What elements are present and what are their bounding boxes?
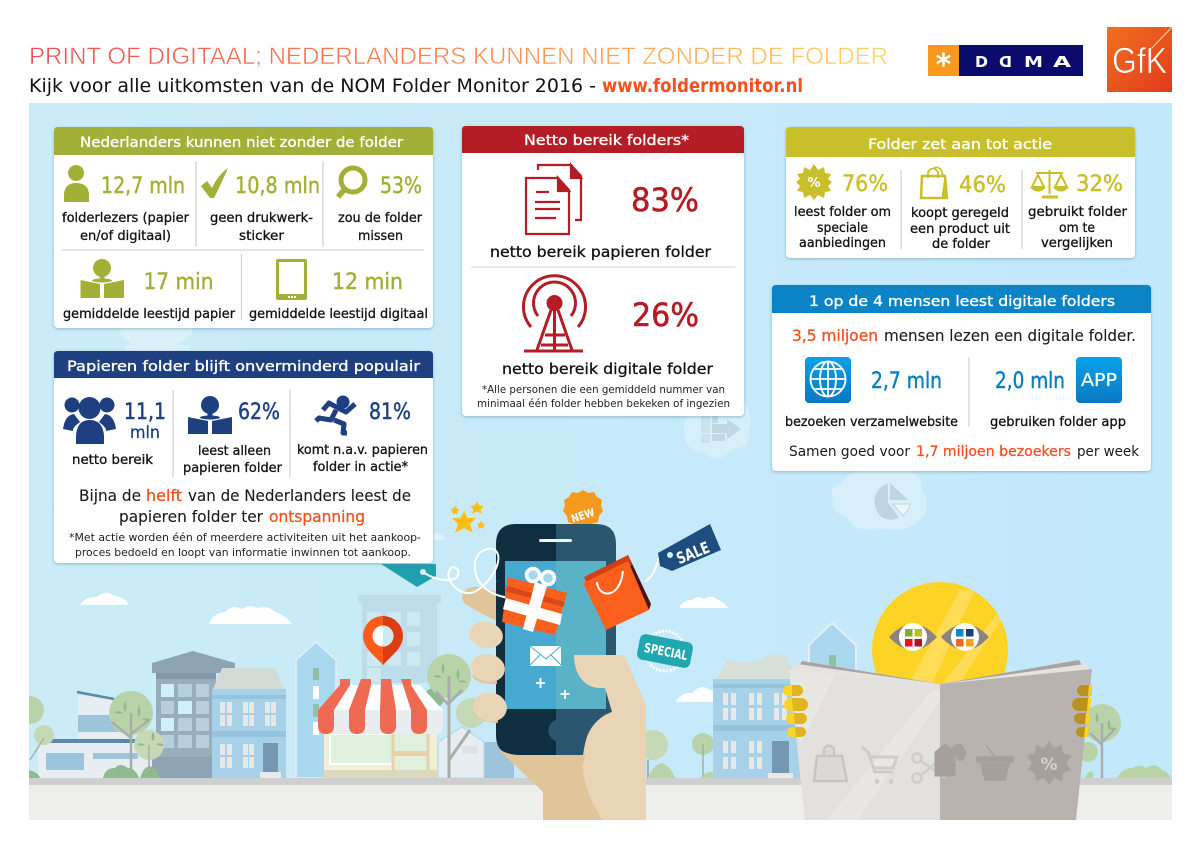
- icon: discount burst: [796, 164, 832, 200]
- header: Papieren folder blijft onverminderd populair: [67, 359, 420, 375]
- icon: tablet: [276, 259, 307, 300]
- text: helft van de Nederlanders: Bijna de: [79, 486, 141, 505]
- logo: DDMA: M: [1024, 53, 1043, 71]
- label: leest alleen papieren folder: leest alleen: [198, 444, 271, 459]
- text: bezoekers per week: per week: [1077, 444, 1140, 460]
- icon: documents: [526, 165, 581, 234]
- label: koopt geregeld: een product uit: [910, 222, 1010, 237]
- icon: APP tile: [1076, 357, 1122, 403]
- faint tall building: [358, 595, 441, 683]
- eye left: [889, 623, 937, 651]
- icon: reader: [80, 259, 124, 298]
- title: PRINT OF DIGITAAL; NEDERLANDERS KUNNEN NIET ZONDER DE FOLDER: [29, 43, 888, 70]
- map pin: [363, 616, 403, 665]
- smartphone: [496, 524, 616, 755]
- logo: GfK: GfK: [1112, 40, 1167, 81]
- panel: Netto bereik folders: [462, 126, 744, 416]
- icon: check: [201, 168, 228, 198]
- stat: 11,1 mln: [124, 400, 166, 443]
- stars: [450, 501, 485, 533]
- stat: 62%: 62%: [238, 400, 280, 425]
- icon: discount burst: %: [807, 176, 821, 191]
- stat: 83%: 83%: [631, 181, 699, 219]
- label: netto bereik digitale folder: netto bereik digitale folder: [502, 360, 714, 378]
- label: zou de folder missen: zou de folder: [338, 211, 423, 226]
- blue townhouse: [212, 668, 286, 778]
- label: zou de folder missen: [338, 211, 423, 244]
- icon: antenna tower: [524, 276, 586, 351]
- narrow blue house: [296, 642, 336, 778]
- label: bezoeken verzamelwebsite: bezoeken verzamelwebsite: [785, 415, 958, 430]
- label: leest alleen papieren folder: papieren folder: [183, 461, 283, 476]
- faint cloud under first panel: [120, 328, 192, 345]
- label: zou de folder missen: missen: [358, 229, 403, 244]
- footnote: proces bedoeld en loopt van informatie inwinnen tot aankoop.: [75, 546, 411, 559]
- header: [462, 126, 744, 153]
- header: Folder zet aan tot actie: [868, 137, 1052, 153]
- sun with eyes: [872, 582, 1008, 684]
- label: gebruikt folder om te vergelijken: vergelijken: [1041, 236, 1113, 251]
- stat: 26%: 26%: [632, 296, 699, 334]
- text: helft van de Nederlanders: ontspanning: [269, 507, 365, 526]
- text: helft van de Nederlanders: [79, 486, 411, 526]
- header: [772, 285, 1151, 313]
- label: folderlezers: folderlezers (papier: [62, 211, 190, 226]
- blue building right: [713, 655, 800, 780]
- subtitle: www.foldermonitor.nl: [602, 75, 803, 97]
- stat: 11,1 mln: mln: [130, 423, 160, 443]
- text: bezoekers per week: [789, 444, 1140, 460]
- label: komt n.a.v. papieren folder in actie: folder in actie*: [313, 460, 408, 475]
- text: helft van de Nederlanders: papieren folder ter: [119, 507, 263, 526]
- footnote: [69, 531, 421, 559]
- panel: Nederlanders kunnen niet zonder de folder: [54, 127, 433, 328]
- paper icon: percent burst: [1027, 741, 1071, 785]
- stat: 76%: 76%: [842, 172, 888, 197]
- newspaper: [783, 660, 1092, 820]
- text: 3,5 miljoen: 3,5 miljoen: [792, 326, 878, 345]
- label: drukwerksticker: geen drukwerk-: [210, 211, 313, 226]
- logo: DDMA: D: [999, 53, 1012, 71]
- text: helft van de Nederlanders: van de Nederlanders leest de: [188, 486, 411, 505]
- label: gebruikt folder om te vergelijken: [1028, 205, 1128, 251]
- gift box: [502, 568, 567, 635]
- footnote: *Alle personen die een gemiddeld nummer van: [482, 383, 725, 396]
- text: 3,5 miljoen: mensen lezen een digitale folder.: [884, 326, 1136, 345]
- text: bezoekers per week: Samen goed voor: [789, 444, 910, 460]
- stat: 81%: 81%: [369, 400, 411, 425]
- badge: SPECIAL: [636, 631, 694, 671]
- stat: 2,0 mln: 2,0 mln: [995, 369, 1065, 394]
- header: Netto bereik folders*: [524, 133, 689, 149]
- paper icon: cart wheels: [875, 779, 894, 784]
- label: speciale aanbiedingen: aanbiedingen: [799, 236, 886, 251]
- icon: reader: [188, 396, 232, 434]
- label: gebruikt folder om te vergelijken: om te: [1059, 221, 1095, 236]
- label: koopt geregeld: [910, 206, 1010, 252]
- shop with striped awning: [318, 679, 443, 778]
- text: bezoekers per week: 1,7 miljoen bezoekers: [916, 444, 1071, 460]
- icon: people: [63, 397, 116, 444]
- logo: DDMA: A: [1053, 53, 1072, 71]
- label: drukwerksticker: [210, 211, 313, 244]
- paper icon: cart: [862, 747, 897, 772]
- stat: 46%: 46%: [959, 173, 1006, 198]
- paper icon: tag: [935, 744, 966, 776]
- paper icon: basket: [977, 745, 1013, 780]
- badge: NEW: [563, 490, 603, 528]
- panel: 1 op de 4 mensen leest digitale folders: [772, 285, 1151, 471]
- panel: Papieren folder blijft onverminderd populair: [54, 351, 433, 563]
- label: folderlezers: [62, 211, 190, 244]
- icon: magnifier: [338, 168, 365, 197]
- label: netto bereik: netto bereik: [72, 453, 153, 468]
- label: folderlezers: en/of digitaal): [80, 229, 171, 244]
- label: leest alleen papieren folder: [183, 444, 283, 476]
- label: koopt geregeld: de folder: [932, 237, 991, 252]
- icon cloud: pie chart: [832, 466, 927, 530]
- ground: [29, 778, 1172, 820]
- paper icon: scissors: [912, 754, 945, 782]
- fingers left: [783, 685, 808, 737]
- label: speciale aanbiedingen: [794, 205, 891, 251]
- tag: SALE: SALE: [674, 538, 712, 568]
- paper icon: percent burst: %: [1040, 755, 1058, 775]
- tag: SALE: [658, 524, 721, 571]
- label: speciale aanbiedingen: speciale: [817, 221, 868, 236]
- logo: GfK: [1107, 27, 1172, 92]
- paper icon: bag: [814, 746, 847, 781]
- label: gebruikt folder om te vergelijken: gebruikt folder: [1028, 205, 1128, 220]
- trees left: [16, 691, 164, 778]
- header: [786, 127, 1135, 157]
- white modern building: [38, 692, 158, 778]
- grey apartment building: [152, 651, 235, 778]
- header: [54, 127, 433, 155]
- header: Nederlanders kunnen niet zonder de folder: [80, 135, 403, 151]
- label: speciale aanbiedingen: leest folder om: [794, 205, 891, 220]
- label: gebruiken folder app: gebruiken folder app: [990, 415, 1126, 430]
- fingers right: [1072, 685, 1092, 737]
- stat: 2,7 mln: 2,7 mln: [871, 369, 942, 394]
- logo: DDMA: *: [936, 48, 952, 83]
- label: netto bereik papieren folder: netto bereik papieren folder: [490, 243, 712, 261]
- faint cloud top panel two: [125, 345, 190, 350]
- footnote: [477, 383, 730, 410]
- logo: DDMA: [928, 45, 1083, 83]
- eye right: [941, 623, 989, 651]
- label: komt n.a.v. papieren folder in actie: komt n.a.v. papieren: [297, 443, 428, 458]
- trees and house behind shop: [424, 654, 514, 778]
- subtitle: Kijk voor alle uitkomsten van de NOM Folder Monitor 2016 -: [29, 75, 596, 97]
- label: leestijd digitaal: gemiddelde leestijd digitaal: [249, 307, 428, 322]
- right trees and bushes: [1078, 704, 1171, 778]
- clouds: [80, 533, 728, 702]
- stat: 12 min: 12 min: [332, 270, 403, 295]
- icon: globe tile: [805, 357, 851, 403]
- shopping bag: [583, 555, 651, 630]
- logo: DDMA: D: [975, 53, 988, 71]
- house behind sun: [809, 623, 856, 672]
- panel: Folder zet aan tot actie: [786, 127, 1135, 258]
- icon: person: [64, 165, 89, 202]
- header: 1 op de 4 mensen leest digitale folders: [809, 294, 1115, 310]
- footnote: *Met actie worden één of meerdere activiteiten uit het aankoop-: [69, 531, 421, 544]
- curly string: [423, 549, 668, 597]
- stat: 32%: 32%: [1076, 172, 1123, 197]
- label: drukwerksticker: sticker: [239, 229, 285, 244]
- label: komt n.a.v. papieren folder in actie: [297, 443, 428, 475]
- stat: 17 min: 17 min: [144, 270, 214, 295]
- stat: 11,1 mln: 11,1: [124, 400, 166, 425]
- label: leestijd papier: gemiddelde leestijd papier: [63, 307, 236, 322]
- hand: palm back: [462, 587, 602, 820]
- icon: runner: [316, 396, 355, 433]
- stat: 10,8 mln: 10,8 mln: [235, 174, 320, 199]
- stat: 53%: 53%: [380, 174, 422, 199]
- trees right of phone: [646, 730, 713, 778]
- plus signs: [536, 678, 570, 699]
- envelope: [530, 646, 561, 666]
- label: koopt geregeld: koopt geregeld: [911, 206, 1009, 221]
- icon: shopping bag: [921, 167, 947, 198]
- hand: fingers and thumb: [467, 619, 646, 820]
- header: [54, 351, 433, 378]
- icon: scales: [1031, 170, 1068, 197]
- badge: NEW: NEW: [569, 506, 596, 526]
- icon: APP tile: APP: [1081, 370, 1117, 391]
- footnote: minimaal één folder hebben bekeken of ingezien: [477, 397, 730, 410]
- icon cloud: checklist arrow: [684, 404, 751, 459]
- teal price tag behind panel: [381, 564, 436, 587]
- stat: 12,7 mln: 12,7 mln: [101, 174, 185, 199]
- text: helft van de Nederlanders: helft: [146, 486, 182, 505]
- badge: SPECIAL: SPECIAL: [643, 641, 689, 664]
